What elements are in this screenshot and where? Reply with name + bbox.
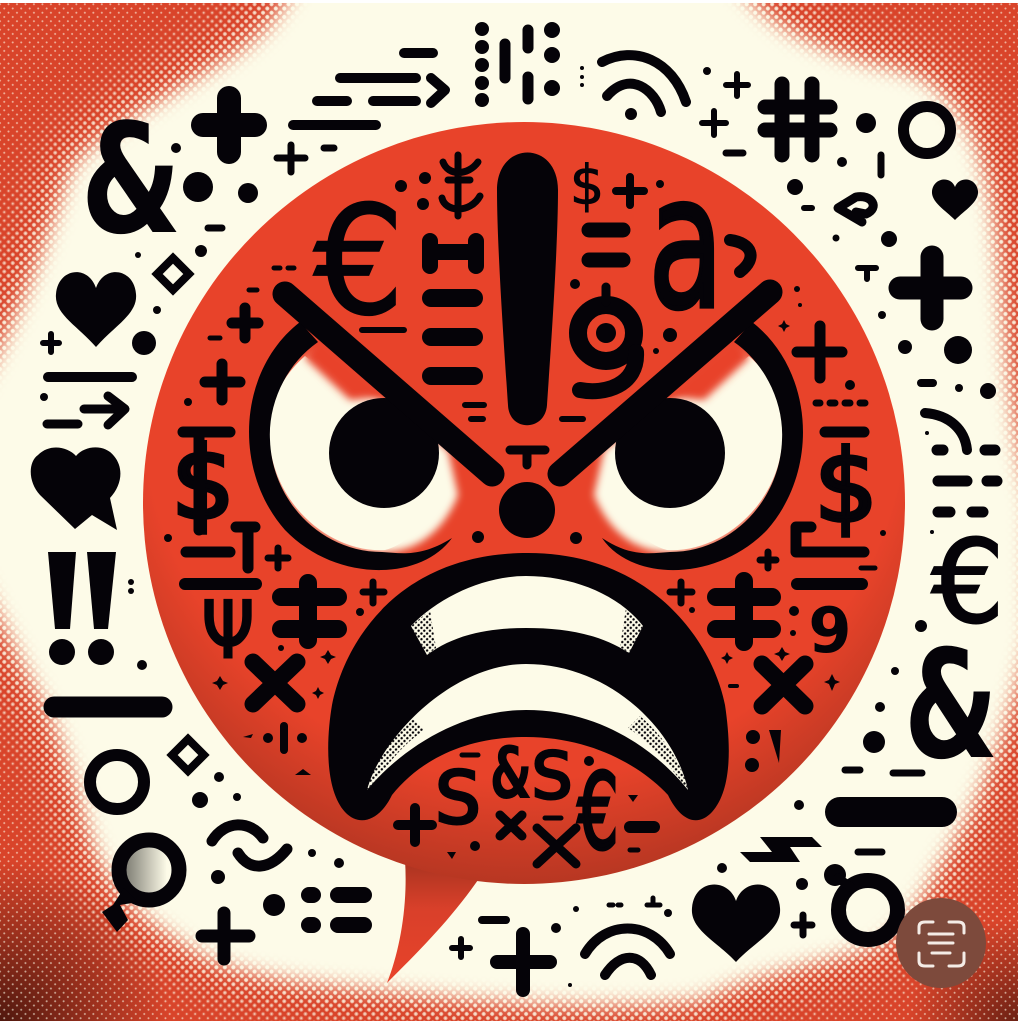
speck dots right [653, 286, 802, 354]
button disc [896, 898, 986, 988]
bar over dollar right [825, 426, 864, 438]
dash near ampersand [208, 224, 222, 232]
eyebrow [560, 292, 770, 474]
diamond lower left [172, 739, 204, 771]
wifi dot [625, 108, 637, 120]
dash under bar [858, 848, 882, 856]
equals lower left [309, 895, 364, 925]
T glyph under exclamation [510, 450, 545, 465]
lower teeth halftone right [628, 716, 688, 790]
heart with tail left [31, 447, 120, 530]
equal bars [589, 230, 623, 260]
eye white glow [594, 350, 783, 552]
dollar left: $ [171, 425, 235, 542]
double plus right [716, 581, 772, 642]
dash right [861, 566, 875, 570]
ring with knob [824, 864, 898, 940]
large plus bottom [497, 934, 550, 990]
dots lower left [192, 772, 344, 916]
e glyph upper right [838, 197, 873, 222]
dollar right: $ [814, 428, 878, 545]
dot left [164, 534, 172, 542]
double plus left [281, 583, 338, 640]
eyebrow [285, 294, 492, 474]
star speck top right [778, 320, 790, 332]
bubble disc [143, 122, 905, 884]
upper teeth [411, 576, 643, 655]
eye white glow [269, 350, 458, 552]
bar right [797, 578, 862, 590]
left eye [249, 294, 492, 570]
small marks left [280, 726, 288, 750]
letter a: a [649, 137, 723, 350]
dotted column [475, 22, 489, 107]
dashes lower right [845, 770, 922, 773]
double exclamation [48, 552, 116, 665]
large plus right [900, 257, 961, 319]
dashes upper right [921, 379, 933, 387]
dash bottom [482, 916, 506, 924]
speech bubble [143, 122, 905, 983]
a tail [730, 240, 751, 272]
star specks [212, 647, 840, 699]
background: dark corner left [0, 860, 170, 1024]
small plus top left [277, 145, 334, 172]
symbols inside the bubble [164, 137, 886, 873]
wave lower left [212, 825, 287, 866]
mouth shape [328, 553, 729, 820]
arrow top [317, 53, 445, 103]
scan icon [919, 922, 964, 966]
small dots by exclamation [128, 579, 147, 670]
specks bottom [551, 863, 808, 987]
trident left: Ψ [202, 586, 254, 676]
heart upper right [932, 180, 978, 220]
nine with ring [578, 287, 636, 391]
T glyph left [186, 527, 255, 568]
H glyph [430, 241, 476, 266]
dash group near eyebrow [362, 330, 583, 419]
bar lower right [840, 797, 942, 827]
small plus top right [616, 177, 644, 205]
dots right upper [925, 383, 996, 435]
ring lower left [90, 755, 144, 809]
small dots left [243, 530, 886, 775]
semicolon right [745, 730, 781, 772]
euro right: € [931, 516, 1005, 650]
bottom S two: S [532, 740, 572, 814]
bottom ampersand: & [490, 731, 532, 816]
anchor glyph top [442, 155, 480, 216]
small dollar top: $ [570, 154, 604, 217]
bar left [185, 578, 256, 590]
vertical dash upper right [878, 155, 884, 175]
pills right [937, 450, 997, 512]
pupil [329, 398, 439, 508]
short dash upper right [804, 205, 812, 211]
upper teeth halftone left [411, 610, 436, 655]
eye shading top [662, 332, 749, 400]
scan button [896, 898, 986, 988]
T bar over dollar left [183, 432, 230, 530]
dots right [863, 530, 934, 753]
dot left of T [184, 398, 192, 406]
bracket right [796, 527, 864, 552]
bar top [293, 120, 376, 130]
arrow left [47, 396, 125, 425]
bottom crosses [500, 815, 576, 864]
bottom dashes [630, 821, 654, 833]
bottom plus [398, 808, 432, 842]
eye white [269, 356, 438, 550]
lower teeth [367, 664, 688, 790]
dots top [395, 172, 664, 289]
plus left lower [205, 364, 240, 400]
small plus bottom right [794, 915, 812, 935]
background: dark corner right [908, 920, 1018, 1024]
nine right: 9 [808, 594, 852, 667]
cross left [253, 662, 297, 704]
bubble tail [387, 860, 478, 983]
small plus right [670, 552, 776, 603]
ampersand top left: & [81, 91, 181, 268]
diamond top left [157, 258, 189, 290]
eye white [614, 356, 783, 550]
bottom specks [447, 756, 638, 859]
lower teeth halftone left [367, 718, 425, 790]
plus right [797, 326, 842, 378]
bottom S: S [435, 756, 481, 840]
small plus top [702, 74, 748, 135]
plus left upper [232, 308, 258, 338]
small plus left [43, 334, 59, 352]
upper teeth halftone right [620, 608, 643, 653]
bottom white edge [0, 1021, 1018, 1024]
dash row right [816, 400, 865, 406]
heart left [56, 272, 136, 347]
pupil [615, 398, 725, 508]
eye ring [249, 322, 452, 570]
wifi arcs [602, 55, 686, 112]
cross right [762, 664, 805, 706]
bottom euro: € [577, 753, 619, 873]
exclamation mark [497, 152, 558, 425]
dot right upper [944, 336, 972, 364]
bar left [48, 372, 132, 382]
plus lower left [202, 913, 249, 959]
small bottom dashes [462, 755, 638, 850]
dots top right of bars [544, 22, 584, 96]
lightning lower right [740, 837, 822, 862]
small dashes left [210, 268, 294, 338]
mouth [328, 553, 729, 820]
large plus top left [203, 98, 255, 152]
dots top left [132, 143, 258, 355]
ampersand right: & [904, 618, 998, 793]
cheek dots [472, 531, 582, 544]
dot lower right [794, 800, 804, 810]
hash glyph [765, 84, 830, 155]
right eye [560, 292, 803, 570]
dot over dollar right [845, 380, 855, 390]
top white edge [0, 0, 1018, 3]
eye shading top [305, 332, 392, 400]
dash right small [730, 684, 737, 688]
small plus bottom [452, 939, 470, 957]
stacked bars [431, 298, 474, 376]
ring upper right [904, 106, 950, 154]
bars top [505, 30, 528, 99]
nose dot [499, 482, 555, 538]
small dashes bottom [609, 898, 660, 905]
small plus left [268, 548, 384, 603]
dots upper right [703, 67, 912, 354]
heart bottom [692, 884, 780, 962]
T glyph upper right [858, 268, 876, 279]
bar lower left [54, 696, 162, 718]
euro sign, upper left: € [314, 174, 404, 349]
dot left [40, 393, 48, 401]
magnifier [102, 840, 179, 932]
eye ring [602, 322, 803, 570]
arcs bottom [585, 928, 670, 975]
dash top [726, 150, 743, 156]
arc right [925, 413, 967, 450]
